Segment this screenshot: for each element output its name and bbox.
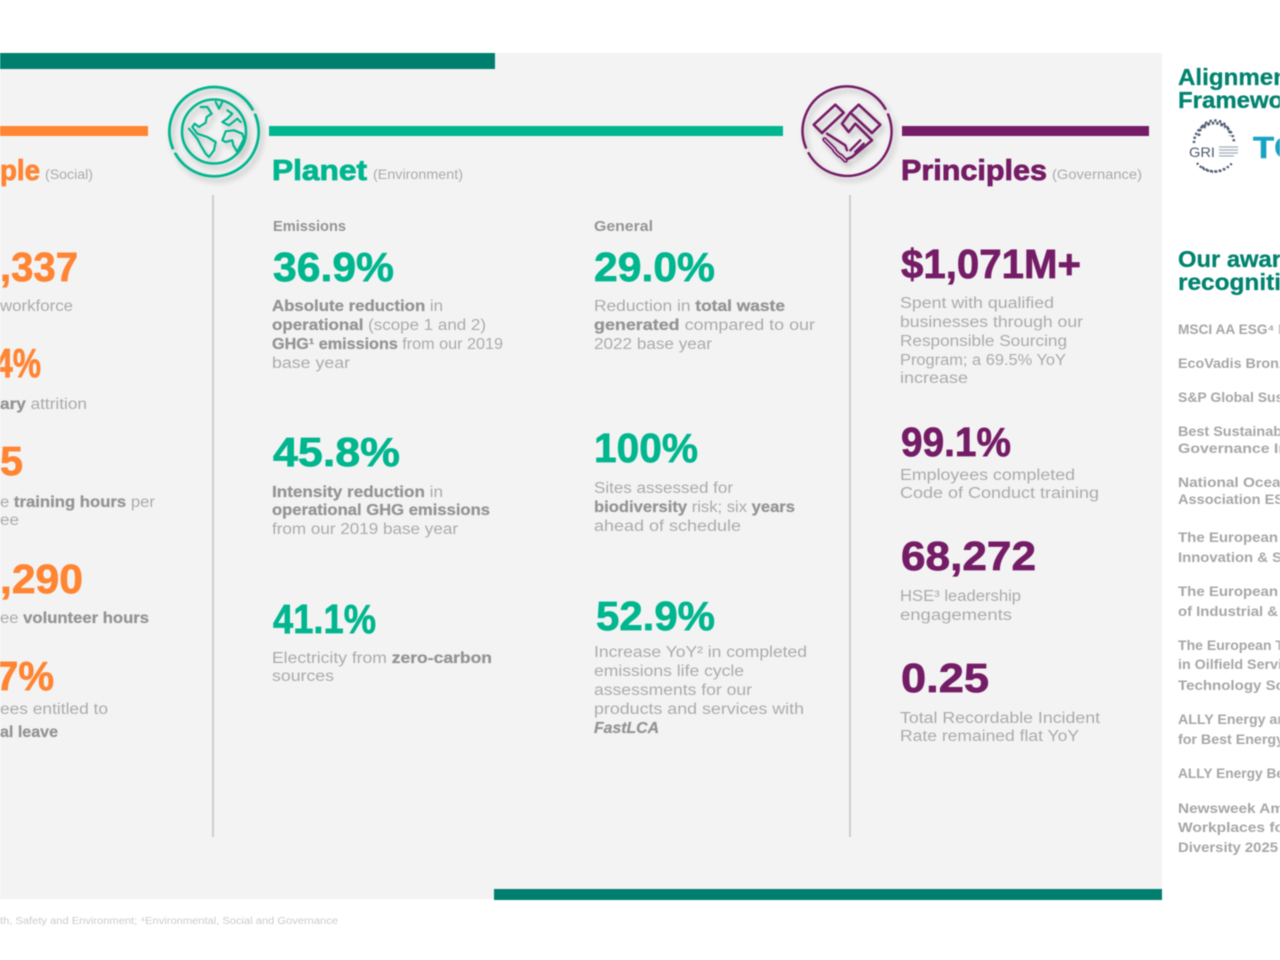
awards list: The European: [1178, 530, 1278, 545]
awards list: for Best Energy: [1178, 732, 1280, 747]
stat: responsible sourcing: increase: [900, 370, 968, 387]
stat: waste reduction: Reduction in total waste: [594, 298, 785, 315]
stat: parental leave: al leave: [0, 724, 58, 741]
stat: attrition: ary attrition: [0, 396, 87, 413]
footnote: th, Safety and Environment; ⁴Environmental, Social and Governance: [0, 916, 338, 927]
stat: life cycle assessments: [594, 593, 807, 737]
stat: workforce: workforce: [0, 298, 73, 315]
stat: responsible sourcing: [900, 241, 1083, 387]
stat: training hours: e training hours per: [0, 494, 155, 511]
stat: intensity reduction: 45.8%: [273, 429, 400, 475]
stat: biodiversity: biodiversity risk; six years: [594, 499, 795, 516]
panel: awards and recognition: [1178, 246, 1280, 855]
stat: life cycle assessments: products and services with: [594, 701, 804, 718]
stat: absolute reduction: GHG¹ emissions from our 2019: [272, 336, 503, 353]
stat: biodiversity: 100%: [594, 425, 698, 471]
awards list: National Ocean: [1178, 475, 1280, 490]
awards list: ALLY Energy an: [1178, 712, 1280, 727]
awards list: [1178, 322, 1280, 855]
stat: biodiversity: ahead of schedule: [594, 518, 741, 535]
stat: code of conduct: Employees completed: [900, 467, 1075, 484]
stat: life cycle assessments: 52.9%: [596, 593, 715, 639]
stat: responsible sourcing: $1,071M+: [901, 241, 1081, 287]
stat: absolute reduction: base year: [272, 355, 350, 372]
stat: incident rate: Rate remained flat YoY: [900, 728, 1079, 745]
principles heading: Principles: [901, 155, 1047, 187]
stat: absolute reduction: 36.9%: [273, 244, 394, 290]
awards heading: recogniti: [1178, 269, 1280, 295]
stat: absolute reduction: operational (scope 1 and 2): [272, 317, 486, 334]
stat: waste reduction: generated compared to our: [594, 317, 815, 334]
stat: waste reduction: 29.0%: [594, 244, 715, 290]
stat: parental leave: ees entitled to: [0, 701, 108, 718]
awards list: The European: [1178, 584, 1278, 599]
awards list: Best Sustainabl: [1178, 424, 1280, 439]
stat: HSE engagements: HSE³ leadership: [900, 588, 1021, 605]
stat: waste reduction: 2022 base year: [594, 336, 712, 353]
stat: intensity reduction: from our 2019 base year: [272, 521, 458, 538]
awards list: EcoVadis Bronz: [1178, 356, 1280, 371]
stat: life cycle assessments: assessments for our: [594, 682, 752, 699]
awards list: The European T: [1178, 638, 1280, 653]
stat: intensity reduction: operational GHG emissions: [272, 502, 490, 519]
principles header bar: [902, 126, 1149, 136]
stat: responsible sourcing: Responsible Sourcing: [900, 333, 1067, 350]
stat: HSE engagements: [900, 533, 1036, 624]
planet heading: Planet: [272, 155, 367, 187]
stat: code of conduct: Code of Conduct training: [900, 485, 1099, 502]
stat: attrition: [0, 340, 87, 413]
awards list: Diversity 2025: [1178, 840, 1279, 855]
panel: people: [0, 126, 155, 741]
panel: principles: [900, 126, 1149, 745]
stat: zero-carbon electricity: [272, 596, 492, 685]
icon: handshake: [803, 86, 892, 176]
panel: alignment frameworks: [1178, 64, 1280, 172]
people subheading: (Social): [45, 166, 93, 182]
alignment heading: [1178, 64, 1280, 113]
stat: incident rate: [900, 655, 1101, 745]
awards list: in Oilfield Servi: [1178, 657, 1280, 672]
awards list: Innovation & S: [1178, 550, 1280, 565]
stat: zero-carbon electricity: Electricity from zero-carbon: [272, 650, 492, 667]
stat: life cycle assessments: FastLCA: [594, 720, 659, 737]
awards list: Newsweek Am: [1178, 801, 1280, 816]
awards heading: [1178, 246, 1280, 295]
planet subheading: (Environment): [373, 166, 463, 182]
stat: incident rate: 0.25: [901, 655, 989, 701]
stat: absolute reduction: [272, 244, 503, 372]
stat: responsible sourcing: Program; a 69.5% YoY: [900, 352, 1066, 369]
stat: intensity reduction: Intensity reduction in: [272, 484, 443, 501]
stat: code of conduct: [900, 419, 1099, 502]
stat: HSE engagements: 68,272: [901, 533, 1036, 579]
awards list: of Industrial &: [1178, 604, 1278, 619]
stat: life cycle assessments: emissions life cycle: [594, 663, 744, 680]
divider: [212, 195, 214, 837]
stat: training hours: 5: [0, 438, 23, 484]
awards list: Governance In: [1178, 441, 1280, 456]
awards list: ALLY Energy Be: [1178, 766, 1280, 781]
stat: volunteer hours: [0, 556, 149, 627]
stat: training hours: [0, 438, 155, 529]
awards heading: Our awar: [1178, 246, 1280, 272]
principles subheading: (Governance): [1052, 166, 1142, 182]
people header bar: [0, 126, 148, 136]
general label: General: [594, 219, 653, 235]
stat: parental leave: [0, 653, 108, 741]
stat: responsible sourcing: businesses through our: [900, 314, 1083, 331]
awards list: Association ES: [1178, 492, 1280, 507]
icon: globe: [169, 87, 259, 176]
stat: workforce: ,337: [0, 244, 78, 290]
stat: waste reduction: [594, 244, 815, 353]
stat: zero-carbon electricity: sources: [272, 668, 334, 685]
stat: biodiversity: Sites assessed for: [594, 480, 733, 497]
stat: training hours: ee: [0, 512, 19, 529]
stat: life cycle assessments: Increase YoY² in completed: [594, 644, 807, 661]
awards list: Technology Sc: [1178, 678, 1280, 693]
stat: absolute reduction: Absolute reduction in: [272, 298, 443, 315]
top teal bar: [0, 53, 495, 69]
people heading: ple: [0, 155, 40, 187]
awards list: Workplaces fo: [1178, 820, 1280, 835]
stat: code of conduct: 99.1%: [901, 419, 1011, 465]
logo: GRI: GRI: [1189, 144, 1215, 160]
divider: [849, 195, 851, 837]
bottom teal bar: [494, 889, 1162, 900]
stat: workforce: [0, 244, 78, 315]
panel: planet: [269, 126, 815, 737]
stat: volunteer hours: ,290: [0, 556, 83, 602]
stat: responsible sourcing: Spent with qualified: [900, 295, 1054, 312]
stat: zero-carbon electricity: 41.1%: [273, 596, 376, 642]
stat: HSE engagements: engagements: [900, 607, 1012, 624]
stat: intensity reduction: [272, 429, 490, 538]
stat: biodiversity: [594, 425, 795, 535]
stat: incident rate: Total Recordable Incident: [900, 710, 1101, 727]
stat: volunteer hours: ee volunteer hours: [0, 610, 149, 627]
planet header bar: [269, 126, 783, 136]
emissions label: Emissions: [273, 219, 346, 235]
